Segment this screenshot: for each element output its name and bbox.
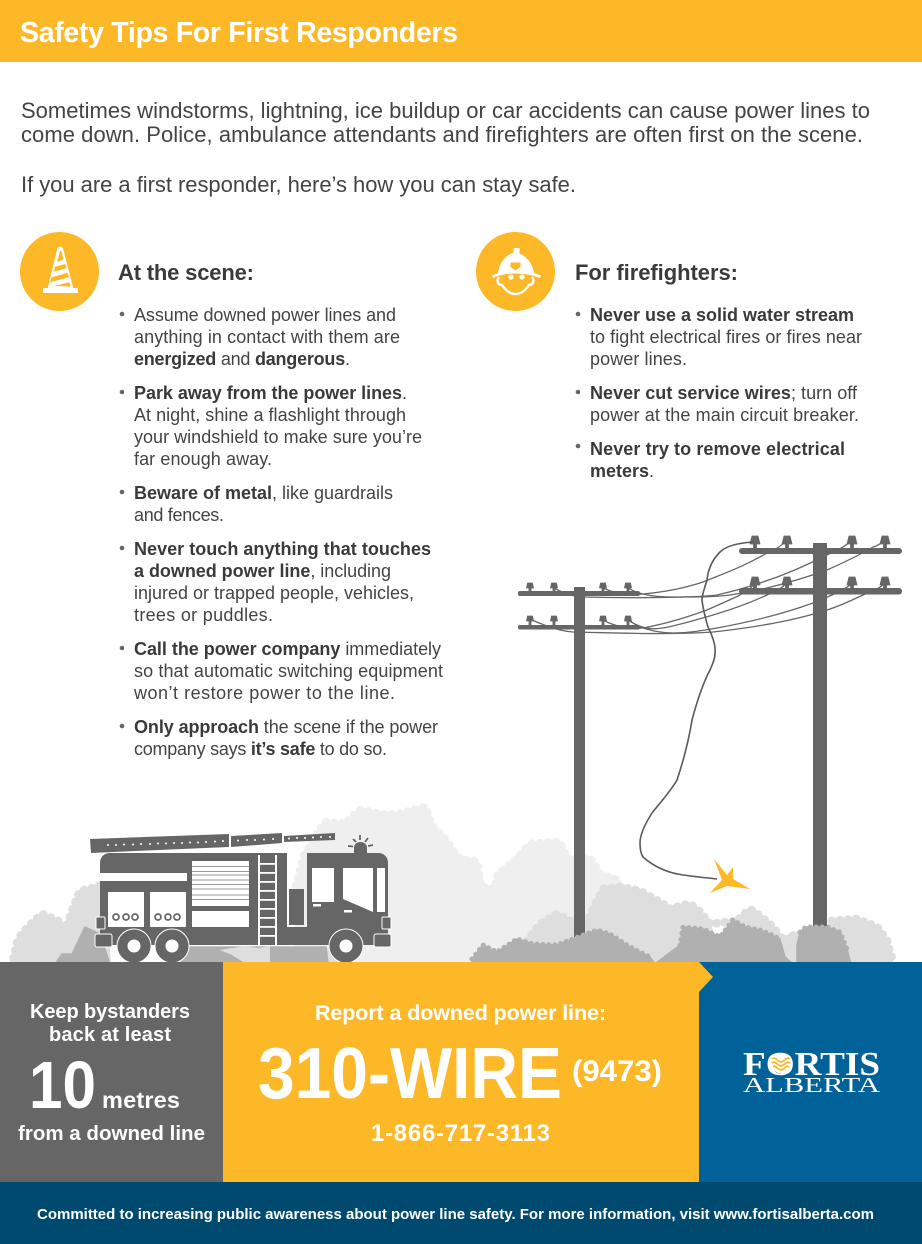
intro text: come down. Police, ambulance attendants and firefighters are often first on the scene.	[21, 122, 863, 147]
right pole	[739, 536, 902, 928]
siren	[348, 835, 373, 853]
icon: firefighter helmet	[476, 232, 555, 311]
bullet list: for firefighters: meters.	[590, 461, 654, 481]
bullet list: at the scene: so that automatic switching equipment	[134, 661, 443, 681]
bullet list: at the scene: Call the power company immediately	[134, 639, 441, 659]
bullet list: at the scene: Assume downed power lines and	[134, 305, 396, 325]
panel: keep bystanders: from a downed line	[18, 1122, 205, 1145]
bullet list: at the scene: a downed power line, including	[134, 561, 391, 581]
panel: report a downed power line: Report a downed power line:	[315, 1001, 606, 1025]
bullet list: at the scene: Only approach the scene if the power	[134, 717, 438, 737]
bullet list: for firefighters: power lines.	[590, 349, 687, 369]
footer	[0, 1182, 922, 1244]
footer: Committed to increasing public awareness about power line safety. For more information, visit www.fortisalberta.com	[37, 1206, 874, 1223]
bullet list: at the scene: far enough away.	[134, 449, 272, 469]
bullet list: at the scene: won’t restore power to the line.	[133, 683, 395, 703]
left pole	[518, 583, 640, 937]
panel: report a downed power line: 1-866-717-3113	[371, 1120, 550, 1147]
logo: Fortis Alberta: FORTIS	[743, 1046, 880, 1083]
white band	[100, 873, 187, 881]
bullet list: at the scene: trees or puddles.	[134, 605, 273, 625]
bullet list: for firefighters: to fight electrical fires or fires near	[590, 327, 862, 347]
bullet list: at the scene: At night, shine a flashlight through	[134, 405, 406, 425]
light patch under truck	[220, 946, 270, 962]
header banner	[0, 0, 922, 62]
background trees: light	[296, 807, 640, 966]
intro text: If you are a first responder, here’s how you can stay safe.	[21, 172, 576, 197]
panel: report a downed power line: 310-WIRE	[258, 1034, 562, 1114]
panel: keep bystanders: metres	[102, 1087, 180, 1113]
heading: for firefighters: For firefighters:	[575, 260, 738, 285]
bullet list: for firefighters: Never try to remove electrical	[590, 439, 845, 459]
heading: at the scene: At the scene:	[118, 260, 254, 285]
logo: Fortis Alberta: ALBERTA	[743, 1073, 881, 1097]
panel: keep bystanders: back at least	[49, 1024, 171, 1046]
downed power line	[640, 542, 753, 879]
spark	[710, 859, 750, 893]
bullet list: at the scene: Never touch anything that touches	[134, 539, 431, 559]
panel: logo	[699, 962, 922, 1182]
bullet list: at the scene: Beware of metal, like guardrails	[134, 483, 393, 503]
wheels	[117, 929, 363, 963]
cab windows	[312, 868, 385, 912]
panel: keep bystanders: 10	[29, 1048, 96, 1123]
panel: report a downed power line: (9473)	[572, 1055, 662, 1088]
bullet list: for firefighters: Never cut service wires; turn off	[590, 383, 858, 403]
power poles	[518, 536, 902, 937]
cab side panel	[289, 889, 304, 925]
bullet list: at the scene: and fences.	[134, 505, 224, 525]
intro text: Sometimes windstorms, lightning, ice buildup or car accidents can cause power lines to	[21, 98, 870, 123]
bumpers	[95, 917, 391, 947]
bullet list: for firefighters	[576, 305, 862, 481]
fire truck	[90, 833, 391, 963]
roller shutter	[192, 861, 249, 927]
intro text	[21, 98, 870, 197]
bullet list: at the scene	[120, 305, 443, 759]
panel: keep bystanders: Keep bystanders	[30, 1001, 190, 1023]
side ladder	[258, 855, 277, 945]
logo: Fortis Alberta	[743, 1046, 881, 1097]
bullet list: at the scene: your windshield to make sure you’re	[134, 427, 422, 447]
bullet list: at the scene: Park away from the power lines.	[134, 383, 407, 403]
bullet list: for firefighters: Never use a solid water stream	[590, 305, 854, 325]
aerial ladder	[90, 833, 335, 853]
icon: traffic cone	[20, 232, 99, 311]
bullet list: at the scene: injured or trapped people, vehicles,	[134, 583, 414, 603]
bullet list: for firefighters: power at the main circuit breaker.	[590, 405, 859, 425]
dark bushes	[55, 920, 851, 964]
panel: keep bystanders	[0, 962, 223, 1182]
panel: report a downed power line	[223, 962, 699, 1182]
title: Safety Tips For First Responders	[20, 17, 458, 49]
power lines	[530, 540, 885, 634]
bullets	[120, 312, 124, 728]
background trees: medium	[12, 884, 893, 966]
bullets	[576, 312, 580, 448]
bullet list: at the scene: energized and dangerous.	[134, 349, 350, 369]
bullet list: at the scene: anything in contact with them are	[134, 327, 400, 347]
truck body	[100, 853, 388, 945]
bullet list: at the scene: company says it’s safe to do so.	[134, 739, 387, 759]
compartment doors	[108, 892, 186, 927]
